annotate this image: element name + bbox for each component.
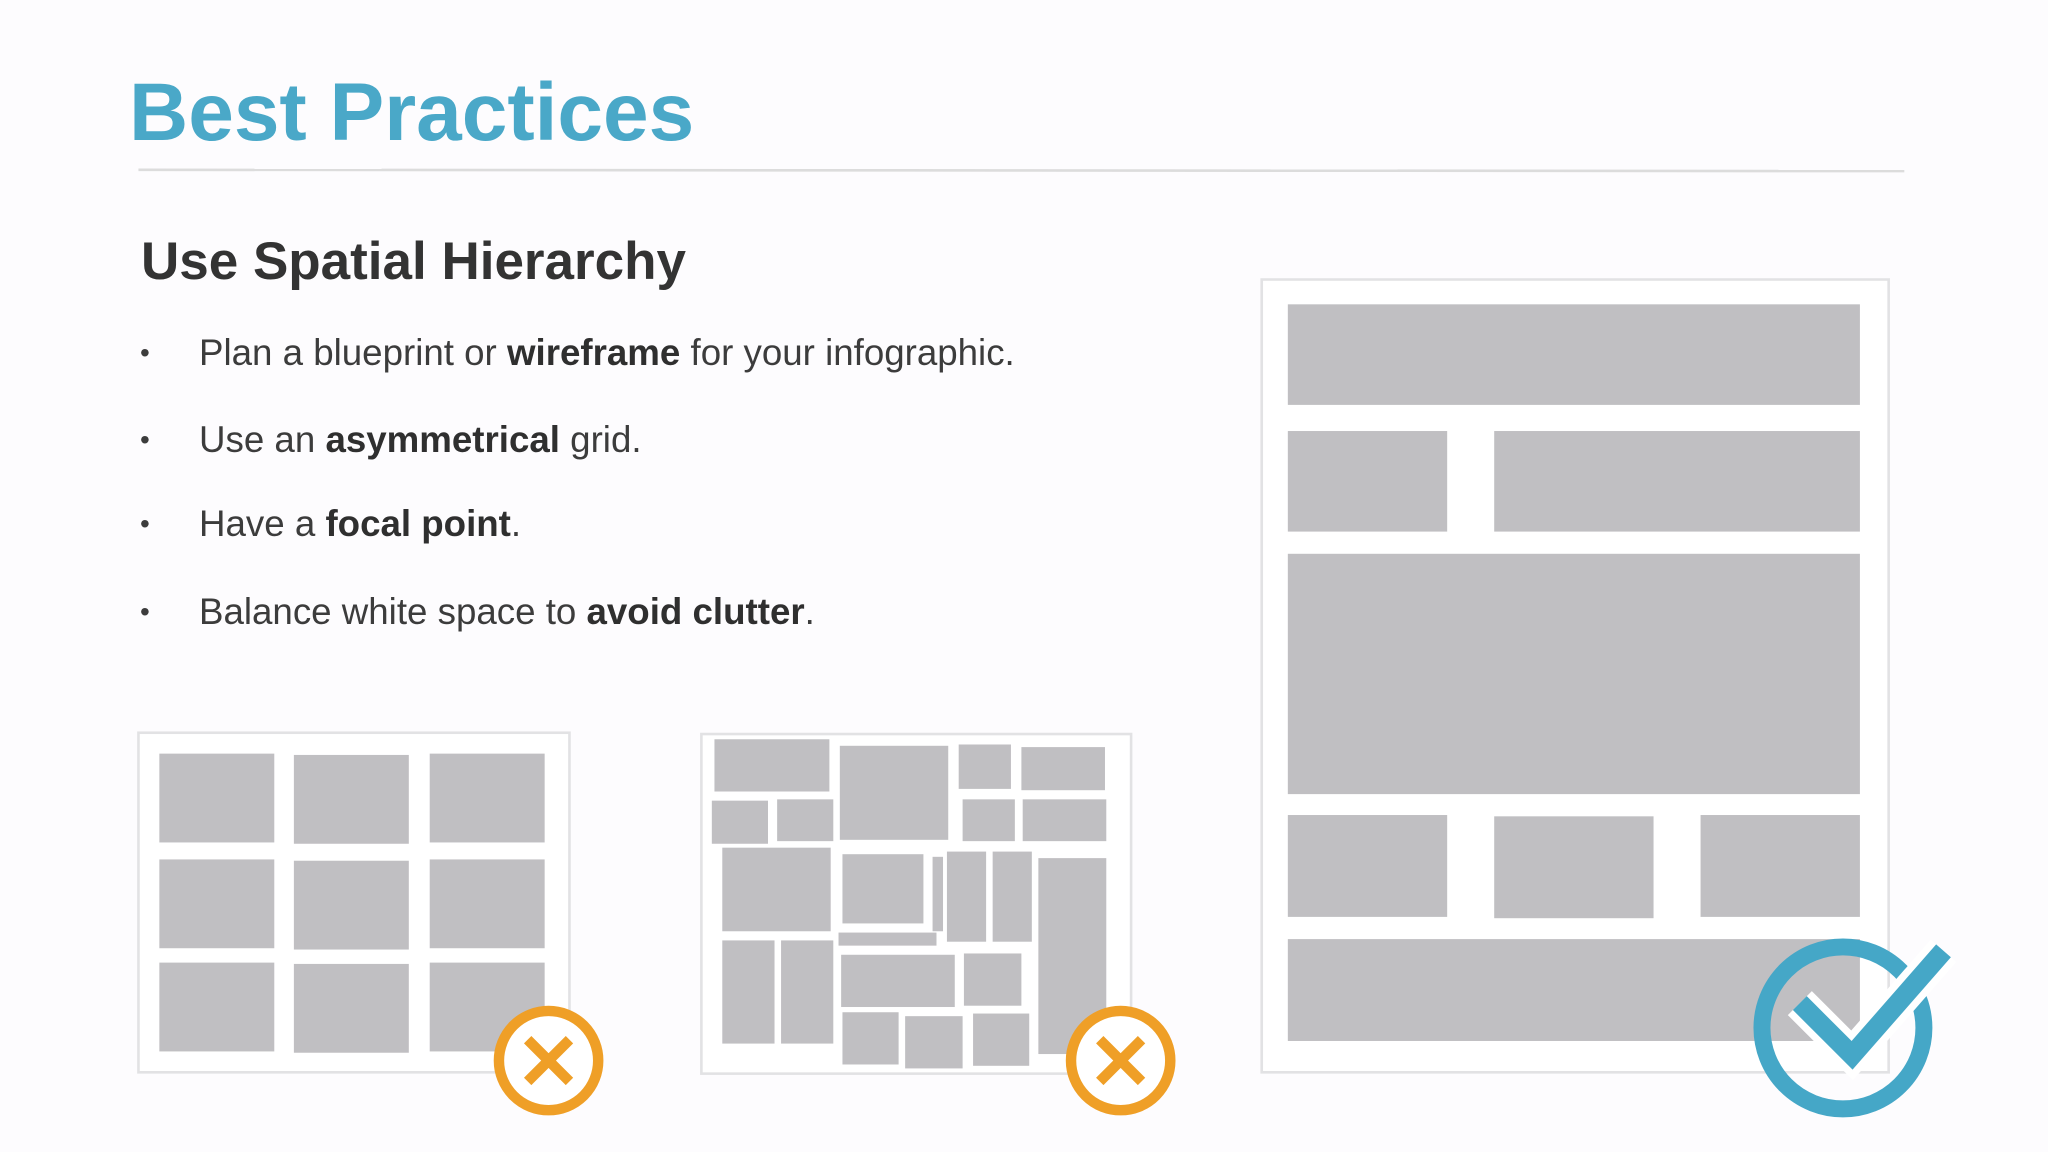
bullet 2: • [140,424,150,455]
bullet 3: Have a focal point. [199,503,521,544]
icon: blue check [1762,947,1944,1109]
icon: orange x 2 [1071,1011,1170,1110]
panel: cluttered grid (bad) [701,734,1131,1074]
subheading: Use Spatial Hierarchy [141,232,686,291]
bullet 3: • [140,508,150,539]
bullet 2: Use an asymmetrical grid. [199,419,642,460]
panel: asymmetric wireframe (good) [1262,280,1889,1072]
bullet 1: • [140,337,150,368]
icon: orange x 1 [499,1011,598,1110]
panel: symmetric grid (bad) [138,733,569,1072]
bullet list [140,332,1015,632]
title: Best Practices [129,67,694,158]
bullet 4: • [140,596,150,627]
bullet 4: Balance white space to avoid clutter. [199,591,815,632]
bullet 1: Plan a blueprint or wireframe for your infographic. [199,332,1015,373]
